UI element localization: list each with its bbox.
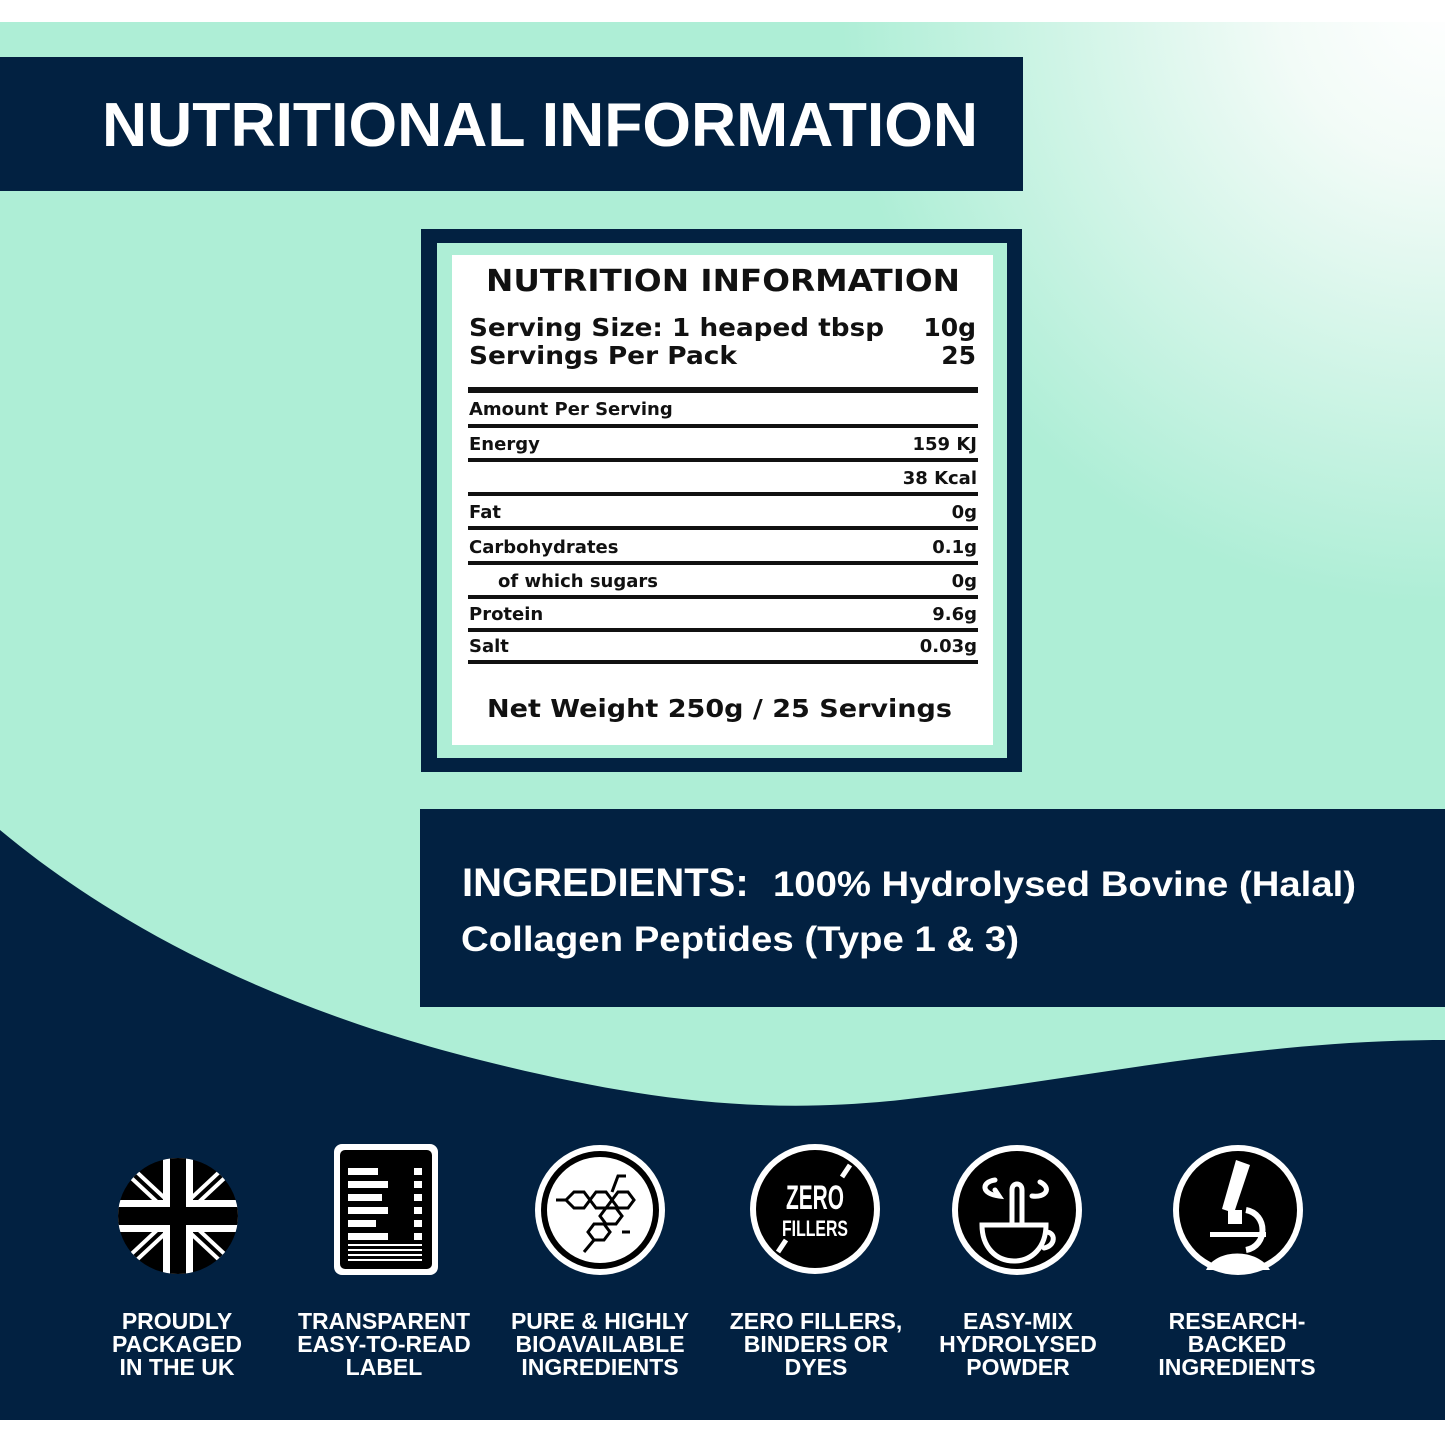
label 1: PACKAGED	[112, 1331, 242, 1357]
nutrition label panel	[421, 229, 1022, 772]
icon: zero fillers	[750, 1144, 880, 1274]
label 1: IN THE UK	[120, 1354, 235, 1380]
serving info: Servings Per Pack	[469, 341, 738, 370]
icon: UK flag	[118, 1158, 238, 1274]
nutrient table: 0g	[952, 502, 977, 523]
nutrient table: Protein	[469, 604, 543, 625]
ingredients box: Collagen Peptides (Type 1 & 3)	[461, 920, 1019, 959]
title bar: NUTRITIONAL INFORMATION	[102, 91, 978, 160]
label 6: INGREDIENTS	[1158, 1354, 1316, 1380]
nutrient table	[468, 387, 978, 664]
label 3: PURE & HIGHLY	[511, 1308, 689, 1334]
label 4: BINDERS OR	[744, 1331, 889, 1357]
serving info	[469, 313, 976, 370]
navy wave	[0, 830, 1445, 1420]
nutrient table: Carbohydrates	[469, 537, 618, 558]
serving info: 10g	[923, 313, 976, 342]
label 2: TRANSPARENT	[298, 1308, 470, 1334]
label 3: INGREDIENTS	[521, 1354, 679, 1380]
nutrient table: 9.6g	[932, 604, 977, 625]
nutrient table: 0g	[952, 571, 977, 592]
ingredients box: 100% Hydrolysed Bovine (Halal)	[773, 865, 1356, 904]
icon: zero fillers: ZERO	[786, 1179, 844, 1217]
nutrient table: 0.1g	[932, 537, 977, 558]
icon: label document	[334, 1144, 438, 1275]
serving info: 25	[941, 341, 976, 370]
nutrient table: of which sugars	[498, 571, 658, 592]
label heading: NUTRITION INFORMATION	[486, 264, 960, 299]
label 5: EASY-MIX	[963, 1308, 1073, 1334]
label 6: RESEARCH-	[1169, 1308, 1305, 1334]
ingredients box	[420, 809, 1445, 1007]
label 5: POWDER	[966, 1354, 1070, 1380]
label 2: EASY-TO-READ	[297, 1331, 471, 1357]
label 6: BACKED	[1188, 1331, 1286, 1357]
label 2: LABEL	[346, 1354, 422, 1380]
nutrient table: 38 Kcal	[903, 468, 977, 489]
ingredients box: INGREDIENTS:	[462, 861, 749, 905]
label 1: PROUDLY	[122, 1308, 232, 1334]
label 3: BIOAVAILABLE	[515, 1331, 685, 1357]
nutrient table: Amount Per Serving	[469, 399, 673, 420]
label 4: ZERO FILLERS,	[730, 1308, 902, 1334]
feature labels	[112, 1308, 1316, 1380]
serving info: Serving Size: 1 heaped tbsp	[469, 313, 884, 342]
nutrient table: 159 KJ	[912, 434, 977, 455]
label 5: HYDROLYSED	[939, 1331, 1097, 1357]
icon: zero fillers: FILLERS	[782, 1216, 848, 1241]
icon: microscope	[1173, 1145, 1303, 1275]
icon: cup	[952, 1145, 1082, 1275]
nutrient table: Fat	[469, 502, 501, 523]
label 4: DYES	[785, 1354, 847, 1380]
title bar	[0, 57, 1023, 191]
nutrient table: 0.03g	[920, 636, 977, 657]
nutrient table: Energy	[469, 434, 540, 455]
nutrient table: Salt	[469, 636, 509, 657]
net weight: Net Weight 250g / 25 Servings	[487, 694, 952, 723]
icon: molecule	[535, 1145, 665, 1275]
